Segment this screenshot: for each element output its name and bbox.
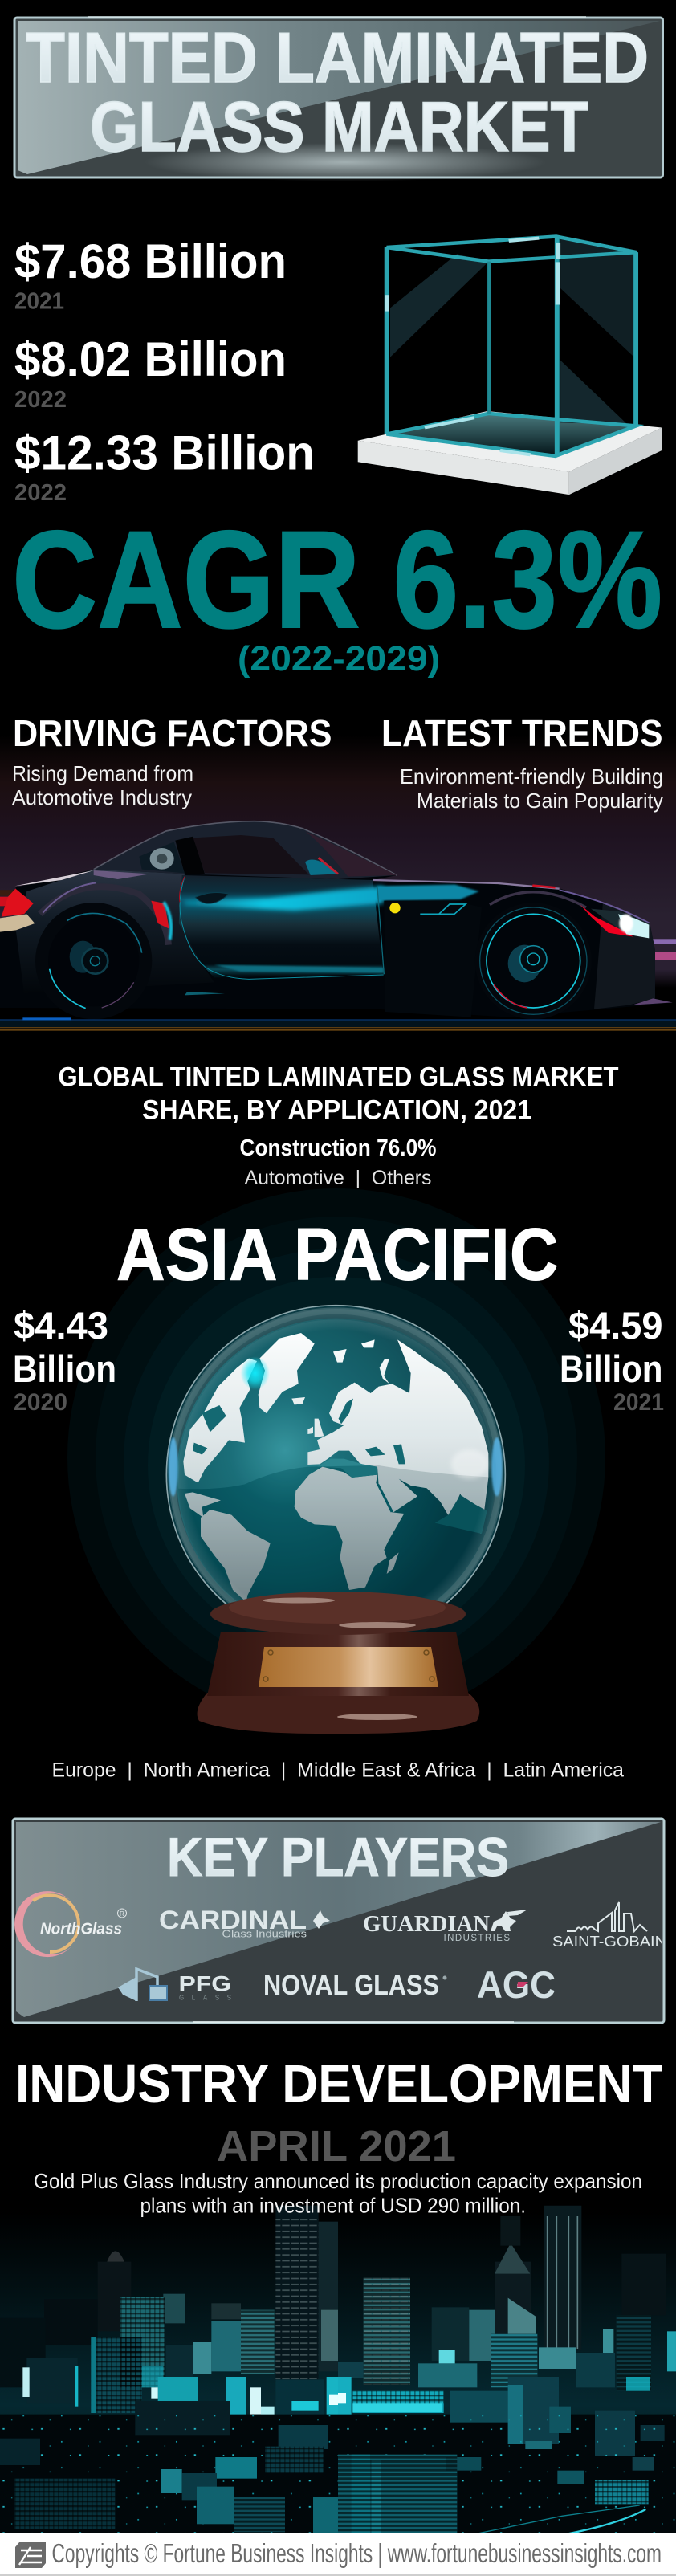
logo: Noval Glass: NOVAL GLASS <box>263 1970 439 2001</box>
logo: Guardian Industries <box>363 1910 527 1943</box>
heading: driving factors: DRIVING FACTORS <box>13 712 332 754</box>
text: leading segment: Construction 76.0% <box>239 1135 437 1161</box>
Asia Pacific value 2021: $4.59 <box>568 1304 663 1347</box>
image: sports car at dusk <box>0 735 676 1036</box>
Asia Pacific value 2021: 2021 <box>613 1389 664 1416</box>
Asia Pacific value 2020: Billion <box>13 1347 116 1390</box>
logo: PFG Glass: PFG <box>178 1972 231 1996</box>
door panel <box>179 875 384 977</box>
rear wheel <box>35 882 171 1019</box>
logo: Guardian Industries: INDUSTRIES <box>443 1934 510 1943</box>
bright lit blocks <box>22 2366 444 2415</box>
roof and greenhouse <box>94 821 397 879</box>
hood and nose <box>594 902 655 1009</box>
market value 2022: 2022 <box>14 387 67 413</box>
front fender <box>384 901 482 1017</box>
text: driving factor detail: Rising Demand from <box>12 761 193 785</box>
heading: market share by application <box>58 1062 619 1126</box>
text: development detail: Gold Plus Glass Industry announced its production capacity expansion <box>34 2169 642 2193</box>
heading: key players: KEY PLAYERS <box>167 1827 509 1888</box>
panel: key players <box>13 1819 666 2023</box>
text: other segments: Automotive | Others <box>244 1167 432 1189</box>
globe halo <box>67 1188 605 1726</box>
market value 2021: 2021 <box>14 289 64 315</box>
Asia Pacific value 2020: 2020 <box>14 1389 67 1416</box>
text: development detail <box>34 2169 642 2218</box>
market value forecast: 2022 <box>14 480 67 506</box>
mid-rise towers <box>26 2278 676 2413</box>
panel: title <box>14 16 663 181</box>
text: other regions: Europe | North America | Middle East & Africa | Latin America <box>51 1759 624 1781</box>
Asia Pacific value 2021: Billion <box>560 1347 663 1390</box>
heading: Asia Pacific: ASIA PACIFIC <box>116 1214 559 1296</box>
icon: wooden globe base with brass plaque <box>198 1592 479 1734</box>
image: night city skyline <box>0 2206 676 2534</box>
logo: Cardinal Glass Industries: Glass Industries <box>222 1927 307 1940</box>
market value 2022: $8.02 Billion <box>14 332 287 386</box>
logo: Cardinal Glass Industries <box>159 1906 330 1940</box>
heading: latest trends: LATEST TRENDS <box>381 712 663 754</box>
logo: PFG Glass: GLASS <box>179 1995 231 2001</box>
logo: PFG Glass <box>118 1969 231 2001</box>
CAGR period: (2022-2029) <box>238 639 440 679</box>
market value 2021: $7.68 Billion <box>14 234 287 288</box>
foreground dark city <box>0 2377 676 2534</box>
footer <box>0 2533 676 2576</box>
text: driving factor detail: Automotive Industry <box>12 785 192 809</box>
text: latest trend detail <box>400 764 663 813</box>
text: development detail: plans with an investment of USD 290 million. <box>140 2194 526 2218</box>
logo: Saint-Gobain <box>553 1901 662 1946</box>
market value 2021 <box>14 234 287 315</box>
Asia Pacific value 2020 <box>13 1304 116 1416</box>
Asia Pacific value 2021 <box>560 1304 664 1416</box>
logo: NorthGlass: NorthGlass <box>40 1921 122 1938</box>
market value forecast <box>14 426 315 506</box>
logo: NorthGlass: R <box>120 1910 124 1918</box>
heading: market share by application: GLOBAL TINTED LAMINATED GLASS MARKET <box>58 1062 619 1092</box>
text: driving factor detail <box>12 761 193 809</box>
logo: Cardinal Glass Industries: CARDINAL <box>159 1906 307 1934</box>
car body silhouette <box>0 821 673 1017</box>
logo: NorthGlass <box>14 1891 126 1957</box>
text: latest trend detail: Environment-friendly Building <box>400 764 663 789</box>
date: April 2021: APRIL 2021 <box>217 2122 456 2170</box>
logo: Guardian Industries: GUARDIAN <box>363 1911 490 1937</box>
road <box>0 1017 676 1031</box>
logo: Fortune Business Insights <box>15 2542 46 2568</box>
icon: glass display case <box>358 237 662 495</box>
market value 2022 <box>14 332 287 413</box>
rear quarter panel <box>16 870 214 993</box>
text: latest trend detail: Materials to Gain Popularity <box>417 789 663 813</box>
title line 2: GLASS MARKET <box>90 87 588 166</box>
logo: AGC: AGC <box>477 1963 556 2006</box>
front wheel <box>475 903 592 1019</box>
heading: market share by application: SHARE, BY APPLICATION, 2021 <box>142 1095 531 1126</box>
Asia Pacific value 2020: $4.43 <box>14 1304 108 1347</box>
icon: snow globe with world map <box>165 1304 506 1604</box>
logo: Saint-Gobain: SAINT-GOBAIN <box>552 1934 666 1950</box>
market value forecast: $12.33 Billion <box>14 426 315 480</box>
